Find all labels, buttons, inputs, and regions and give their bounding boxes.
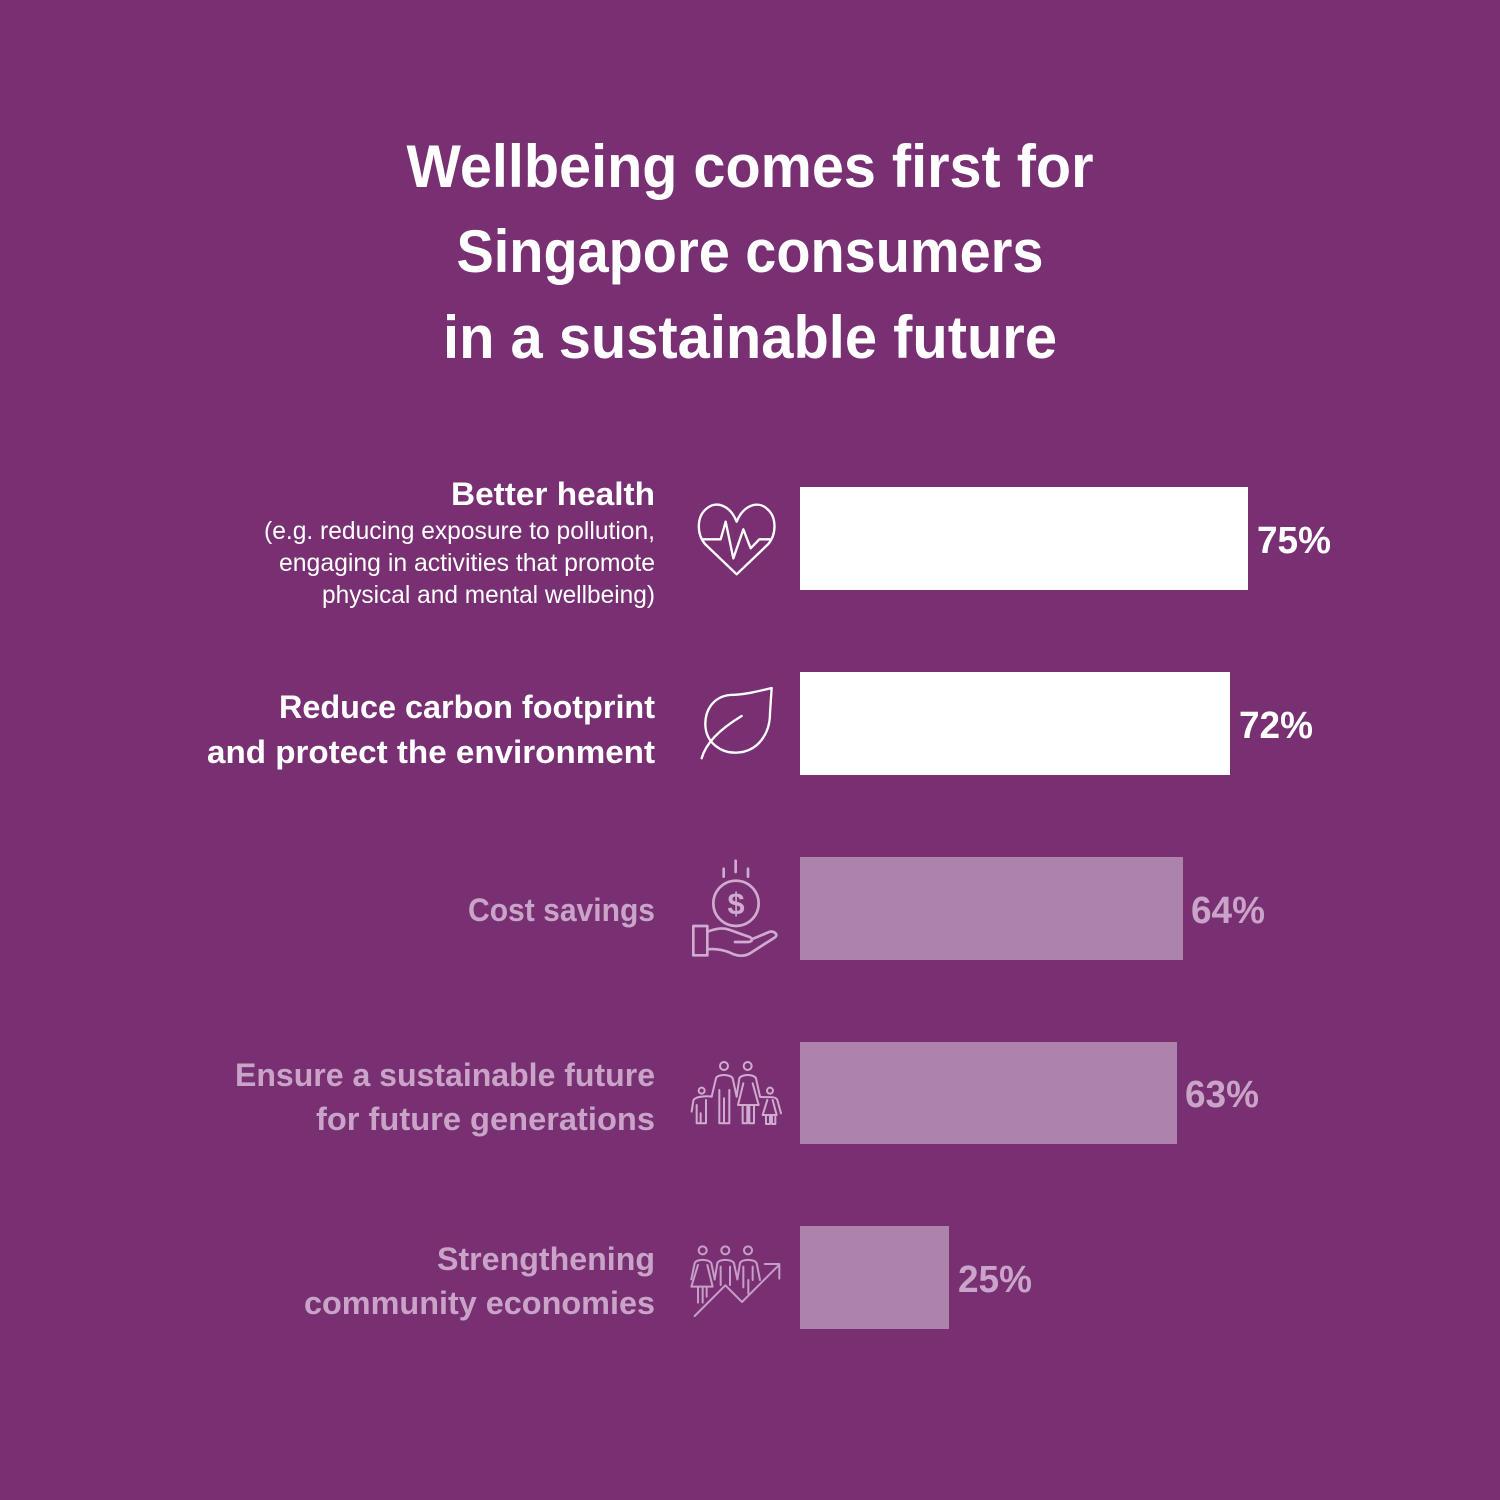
title: [406, 133, 1094, 371]
bar: better health 75%: [800, 487, 1248, 590]
bar: reduce carbon footprint 72%: [800, 672, 1230, 775]
value: 75%: 75%: [1257, 520, 1331, 562]
label: future generations: Ensure a sustainable future: [235, 1057, 655, 1093]
label: future generations: for future generations: [316, 1101, 655, 1137]
label: better health: (e.g. reducing exposure to pollution,: [264, 517, 655, 545]
title: Wellbeing comes first for: [406, 133, 1094, 200]
title: in a sustainable future: [443, 304, 1057, 371]
icon: family: [692, 1062, 781, 1124]
bar: future generations 63%: [800, 1042, 1177, 1144]
title: Singapore consumers: [456, 218, 1044, 285]
label: reduce carbon footprint: and protect the environment: [207, 734, 655, 770]
icon: coin over hand: $: [727, 887, 745, 921]
label: better health: [264, 476, 655, 609]
label: future generations: [235, 1057, 655, 1137]
bar: community economies 25%: [800, 1226, 949, 1329]
label: better health: physical and mental wellbeing): [322, 581, 655, 609]
label: cost savings: Cost savings: [468, 892, 655, 928]
value: 64%: 64%: [1191, 890, 1265, 932]
value: 72%: 72%: [1239, 705, 1313, 747]
icon: heart with pulse: [699, 505, 774, 574]
icon: coin over hand: [693, 861, 776, 956]
label: better health: Better health: [451, 476, 655, 512]
value: 63%: 63%: [1185, 1074, 1259, 1116]
row: future generations: [235, 1042, 1259, 1144]
row: cost savings: [468, 857, 1265, 960]
row: reduce carbon footprint: [207, 672, 1313, 775]
label: better health: engaging in activities that promote: [279, 549, 655, 577]
row: community economies: [304, 1226, 1032, 1329]
label: community economies: Strengthening: [437, 1241, 655, 1277]
icon: people with rising arrow: [691, 1246, 779, 1316]
value: 25%: 25%: [958, 1259, 1032, 1301]
row: better health: [264, 476, 1331, 609]
bar: cost savings 64%: [800, 857, 1183, 960]
label: reduce carbon footprint: Reduce carbon footprint: [279, 689, 655, 725]
label: community economies: [304, 1241, 655, 1321]
label: community economies: community economies: [304, 1285, 655, 1321]
label: reduce carbon footprint: [207, 689, 655, 770]
icon: leaf: [702, 688, 772, 758]
